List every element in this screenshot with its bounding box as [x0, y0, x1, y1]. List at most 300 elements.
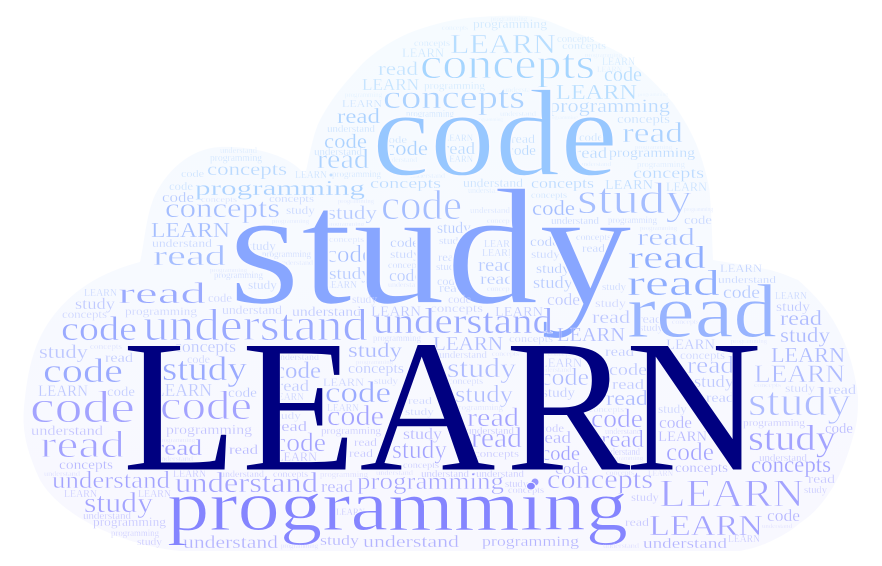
band: lavender blue words in the middle: understand	[222, 302, 283, 317]
band: lavender blue words in the middle: study	[748, 378, 852, 424]
band: light blue words at the top: understand	[503, 86, 540, 94]
band: violet blue words at the bottom: programming	[606, 456, 643, 462]
word: code: code	[372, 65, 618, 202]
band: periwinkle words around the large study: programming	[338, 199, 374, 205]
band: light blue words at the top: programming	[345, 91, 382, 99]
band: light blue words at the top: LEARN	[402, 45, 445, 60]
band: lavender blue words in the middle: read	[828, 383, 856, 398]
band: sky blue words around the large code: concepts	[617, 111, 670, 126]
band: lavender blue words in the middle: study	[776, 300, 810, 315]
band: violet blue words at the bottom: read	[349, 446, 373, 460]
band: periwinkle words around the large study: LEARN	[484, 239, 517, 250]
band: sky blue words around the large code	[169, 65, 708, 202]
band: periwinkle words around the large study: programming	[262, 249, 311, 259]
band: periwinkle words around the large study: study	[436, 262, 460, 273]
band: periwinkle words around the large study: study	[577, 174, 692, 223]
band: lavender blue words in the middle: read	[612, 377, 645, 393]
band: sky blue words around the large code: understand	[220, 146, 257, 155]
band: lavender blue words in the middle: understand	[538, 366, 572, 374]
band: lavender blue words in the middle: read	[118, 277, 206, 310]
band: violet blue words at the bottom: understand	[376, 469, 414, 477]
band: lavender blue words in the middle: concepts	[90, 342, 122, 351]
band: lavender blue words in the middle: concepts	[348, 361, 404, 377]
band: periwinkle words around the large study: read	[480, 271, 514, 288]
band: periwinkle words around the large study: read	[153, 240, 227, 272]
band: violet blue words at the bottom: concepts	[59, 458, 113, 473]
band: violet blue words at the bottom: read	[471, 423, 522, 454]
band: sky blue words around the large code: code	[181, 168, 204, 180]
band: violet blue words at the bottom: understand	[602, 447, 640, 458]
band: periwinkle words around the large study: code	[532, 196, 575, 220]
band: periwinkle words around the large study: study	[531, 247, 560, 261]
band: lavender blue words in the middle: concepts	[548, 352, 575, 358]
band: violet blue words at the bottom: understand	[421, 469, 469, 480]
band: lavender blue words in the middle: study	[447, 353, 517, 383]
band: periwinkle words around the large study: understand	[152, 236, 212, 250]
band: violet blue words at the bottom: study	[84, 488, 153, 519]
band: periwinkle words around the large study: LEARN	[720, 261, 762, 275]
band: violet blue words at the bottom: LEARN	[658, 429, 707, 445]
band: light blue words at the top: LEARN	[450, 29, 556, 59]
word: read large: read	[627, 270, 777, 354]
band: periwinkle words around the large study: LEARN	[325, 280, 357, 291]
band: lavender blue words in the middle: code	[609, 360, 647, 379]
band: lavender blue words in the middle: concepts	[174, 337, 236, 356]
band: violet blue words at the bottom: LEARN	[64, 489, 97, 500]
band: violet blue words at the bottom: programming	[743, 418, 805, 429]
band: lavender blue words in the middle: concepts	[448, 376, 484, 386]
band: periwinkle words around the large study: programming	[608, 215, 657, 225]
band: lavender blue words in the middle: LEARN	[154, 380, 212, 400]
band: violet blue words at the bottom: study	[137, 537, 162, 548]
band: sky blue words around the large code: code	[324, 131, 367, 153]
band: violet blue words at the bottom: read	[275, 419, 308, 435]
band: violet blue words at the bottom: programming	[357, 469, 504, 495]
band: violet blue words at the bottom: understand	[476, 469, 524, 480]
band: lavender blue words in the middle: LEARN	[771, 343, 845, 367]
band: violet blue words at the bottom: read	[40, 424, 125, 466]
band: violet blue words at the bottom: LEARN	[173, 468, 206, 480]
band: sky blue words around the large code: LEARN	[605, 178, 653, 193]
band: sky blue words around the large code: code	[383, 134, 407, 146]
band: lavender blue words in the middle: read	[780, 306, 823, 330]
band: lavender blue words in the middle: programming	[731, 339, 767, 345]
band: violet blue words at the bottom: code	[659, 413, 692, 432]
band: sky blue words around the large code: concepts	[383, 80, 525, 116]
band: periwinkle words around the large study: concepts	[576, 232, 612, 242]
band: violet blue words at the bottom	[30, 381, 853, 552]
band: sky blue words around the large code: concepts	[531, 190, 568, 200]
band: light blue words at the top: programming	[424, 80, 485, 92]
word: study: study	[228, 155, 632, 339]
band: violet blue words at the bottom: LEARN	[648, 469, 673, 478]
band: periwinkle words around the large study: concepts	[487, 217, 515, 225]
band: periwinkle words around the large study: code	[389, 266, 422, 285]
band: lavender blue words in the middle: code	[325, 376, 391, 409]
band: violet blue words at the bottom: read	[354, 435, 377, 449]
band: lavender blue words in the middle: programming	[356, 360, 393, 366]
band: lavender blue words in the middle: code	[274, 358, 321, 383]
band: lavender blue words in the middle: study	[455, 382, 513, 408]
band: violet blue words at the bottom: LEARN	[276, 449, 318, 464]
band: periwinkle words around the large study: code	[381, 183, 462, 229]
band: violet blue words at the bottom: programming	[281, 542, 318, 550]
band: violet blue words at the bottom: programming	[93, 514, 167, 529]
band: lavender blue words in the middle: code	[43, 353, 123, 390]
band: light blue words at the top: LEARN	[597, 65, 622, 74]
band: violet blue words at the bottom: code	[160, 382, 252, 428]
band: sky blue words around the large code: understand	[410, 172, 446, 180]
band: lavender blue words in the middle: read	[105, 351, 133, 366]
band: lavender blue words in the middle: LEARN	[272, 392, 304, 403]
band: periwinkle words around the large study: concepts	[269, 193, 314, 205]
band: periwinkle words around the large study: read	[627, 263, 720, 303]
band: light blue words at the top: concepts	[562, 40, 606, 52]
band: lavender blue words in the middle: code	[448, 292, 471, 306]
band: light blue words at the top: LEARN	[362, 75, 419, 94]
band: periwinkle words around the large study: understand	[470, 206, 510, 215]
band: violet blue words at the bottom: LEARN	[649, 510, 763, 542]
band: lavender blue words in the middle: read	[277, 378, 309, 395]
band: lavender blue words in the middle: concepts	[492, 350, 519, 358]
band: periwinkle words around the large study: code	[723, 282, 760, 302]
band: sky blue words around the large code: programming	[475, 118, 504, 123]
band: lavender blue words in the middle: understand	[292, 305, 361, 320]
band: violet blue words at the bottom: LEARN	[659, 472, 804, 515]
band: violet blue words at the bottom: understand	[83, 511, 131, 522]
band: violet blue words at the bottom: programming	[166, 423, 252, 438]
band: periwinkle words around the large study: study	[248, 277, 278, 292]
band: violet blue words at the bottom: read	[321, 477, 354, 496]
band: periwinkle words around the large study: study	[437, 220, 471, 237]
band: periwinkle words around the large study: study	[286, 203, 315, 217]
band: sky blue words around the large code: understand	[500, 110, 537, 118]
band: periwinkle words around the large study: programming	[684, 207, 713, 213]
band: lavender blue words in the middle: LEARN	[754, 361, 845, 388]
band: lavender blue words in the middle: study	[352, 292, 377, 306]
band: violet blue words at the bottom: understand	[643, 536, 728, 552]
band: violet blue words at the bottom: study	[505, 479, 528, 490]
band: lavender blue words in the middle: LEARN	[557, 324, 625, 346]
band: sky blue words around the large code: programming	[210, 153, 262, 164]
band: violet blue words at the bottom: study	[392, 435, 447, 464]
band: violet blue words at the bottom: programming	[320, 470, 368, 479]
band: violet blue words at the bottom: understand	[44, 470, 81, 478]
band: sky blue words around the large code: understand	[463, 175, 524, 190]
band: violet blue words at the bottom: code	[767, 506, 800, 525]
band: violet blue words at the bottom: understand	[603, 542, 640, 550]
band: lavender blue words in the middle: concepts	[754, 383, 782, 389]
band: light blue words at the top: programming	[491, 15, 527, 23]
band: violet blue words at the bottom: code	[274, 428, 326, 457]
band: lavender blue words in the middle: concepts	[672, 318, 699, 326]
band: light blue words at the top	[345, 15, 669, 104]
band: violet blue words at the bottom: concepts	[751, 452, 831, 477]
band: lavender blue words in the middle: LEARN	[433, 333, 503, 355]
word: programming: programming	[167, 466, 628, 546]
band: lavender blue words in the middle: study	[639, 322, 663, 334]
band: sky blue words around the large code: LEARN	[444, 154, 473, 164]
band: violet blue words at the bottom: code	[555, 459, 588, 478]
band: lavender blue words in the middle: study	[75, 296, 115, 313]
band: lavender blue words in the middle: LEARN	[495, 305, 543, 320]
band: sky blue words around the large code: read	[337, 104, 381, 128]
band: lavender blue words in the middle: study	[694, 372, 735, 391]
band: lavender blue words in the middle: understand	[275, 352, 320, 362]
band: periwinkle words around the large study: read	[438, 250, 460, 264]
band: lavender blue words in the middle: study	[348, 340, 402, 362]
band: periwinkle words around the large study: programming	[214, 270, 263, 280]
band: periwinkle words around the large study	[84, 155, 807, 339]
band: sky blue words around the large code: programming	[406, 109, 454, 120]
band: periwinkle words around the large study: programming	[640, 226, 677, 232]
band: violet blue words at the bottom: read	[601, 427, 644, 453]
band: periwinkle words around the large study: LEARN	[84, 287, 117, 299]
band: sky blue words around the large code: programming	[332, 169, 381, 179]
band: lavender blue words in the middle: concepts	[509, 334, 553, 345]
band: lavender blue words in the middle: concepts	[62, 307, 107, 321]
band: periwinkle words around the large study: study	[329, 264, 372, 283]
band: sky blue words around the large code: concepts	[370, 176, 441, 192]
band: violet blue words at the bottom: code	[327, 401, 384, 432]
band: violet blue words at the bottom: understand	[363, 532, 460, 551]
band: periwinkle words around the large study: understand	[551, 215, 599, 227]
band: sky blue words around the large code: programming	[635, 145, 672, 151]
band: violet blue words at the bottom: code	[30, 381, 135, 432]
band: sky blue words around the large code: understand	[580, 162, 611, 168]
band: lavender blue words in the middle: programming	[125, 304, 197, 318]
band: sky blue words around the large code: understand	[314, 147, 362, 158]
band: sky blue words around the large code: code	[507, 143, 536, 159]
band: violet blue words at the bottom: understand	[157, 455, 194, 463]
band: sky blue words around the large code: LEARN	[295, 169, 327, 181]
band: violet blue words at the bottom: code	[540, 421, 564, 435]
band: sky blue words around the large code: programming	[549, 96, 671, 117]
band: violet blue words at the bottom: understand	[183, 532, 278, 552]
band: violet blue words at the bottom: read	[229, 443, 258, 458]
band: sky blue words around the large code: read	[317, 144, 370, 174]
band: periwinkle words around the large study: programming	[210, 268, 247, 274]
band: periwinkle words around the large study: understand	[718, 274, 777, 286]
band: violet blue words at the bottom: LEARN	[138, 489, 171, 500]
band: sky blue words around the large code: programming	[609, 146, 695, 161]
band: violet blue words at the bottom: concepts	[403, 460, 440, 470]
band: violet blue words at the bottom: code	[666, 439, 714, 466]
band: periwinkle words around the large study: read	[637, 225, 695, 251]
band: periwinkle words around the large study: study	[247, 238, 277, 253]
band: sky blue words around the large code: LEARN	[444, 133, 473, 143]
band: lavender blue words in the middle: LEARN	[371, 304, 421, 320]
band: periwinkle words around the large study: understand	[388, 281, 424, 289]
band: light blue words at the top: concepts	[414, 38, 451, 48]
band: sky blue words around the large code: code	[385, 138, 428, 160]
band: periwinkle words around the large study: study	[390, 247, 420, 261]
band: violet blue words at the bottom: read	[808, 471, 836, 486]
band: periwinkle words around the large study: study	[536, 262, 570, 277]
band: periwinkle words around the large study: study	[439, 235, 465, 247]
band: periwinkle words around the large study: study	[533, 273, 574, 292]
band: lavender blue words in the middle: read	[408, 395, 433, 407]
band: violet blue words at the bottom: programming	[111, 528, 159, 538]
band: lavender blue words in the middle: study	[39, 342, 89, 363]
band: violet blue words at the bottom: study	[631, 490, 659, 504]
band: sky blue words around the large code: understand	[384, 156, 418, 164]
band: lavender blue words in the middle: LEARN	[666, 337, 715, 353]
band: sky blue words around the large code: programming	[195, 176, 366, 200]
band: lavender blue words in the middle: programming	[454, 403, 503, 412]
band: lavender blue words in the middle: study	[780, 323, 831, 347]
band: violet blue words at the bottom: understand	[52, 468, 170, 494]
band: violet blue words at the bottom: study	[748, 418, 836, 458]
band: violet blue words at the bottom: study	[804, 485, 827, 496]
band: periwinkle words around the large study: code	[326, 242, 373, 268]
band: periwinkle words around the large study: read	[628, 239, 706, 275]
band: light blue words at the top: concepts	[442, 24, 468, 32]
band: periwinkle words around the large study: programming	[327, 222, 364, 228]
band: periwinkle words around the large study: code	[390, 236, 419, 251]
band: violet blue words at the bottom: code	[541, 443, 580, 465]
band: periwinkle words around the large study: read	[478, 255, 515, 276]
band: periwinkle words around the large study: code	[530, 235, 559, 250]
band: violet blue words at the bottom: programming	[321, 426, 381, 437]
band: violet blue words at the bottom: understand	[220, 469, 265, 479]
band: periwinkle words around the large study: code	[437, 274, 460, 288]
band: lavender blue words in the middle: code	[61, 311, 137, 348]
band: sky blue words around the large code: concepts	[633, 165, 704, 182]
band: periwinkle words around the large study: LEARN	[482, 248, 515, 259]
band: violet blue words at the bottom: read	[625, 515, 649, 529]
band: lavender blue words in the middle: LEARN	[323, 375, 364, 389]
band: periwinkle words around the large study: read	[582, 241, 605, 255]
band: lavender blue words in the middle: concepts	[589, 405, 624, 414]
band: violet blue words at the bottom: concepts	[474, 448, 519, 460]
band: sky blue words around the large code: LEARN	[342, 98, 382, 110]
band: lavender blue words in the middle: read	[687, 353, 734, 379]
band: violet blue words at the bottom: understand	[759, 453, 807, 464]
band: violet blue words at the bottom: understand	[466, 426, 514, 437]
band: violet blue words at the bottom: study	[403, 426, 442, 443]
band: sky blue words around the large code: programming	[637, 160, 685, 169]
band: sky blue words around the large code: read	[575, 145, 607, 162]
band: violet blue words at the bottom: concepts	[675, 461, 728, 476]
band: violet blue words at the bottom: concepts	[547, 464, 653, 494]
band: violet blue words at the bottom: code	[591, 404, 643, 433]
band: light blue words at the top: read	[378, 59, 419, 80]
band: violet blue words at the bottom: code	[825, 421, 853, 437]
band: periwinkle words around the large study: study	[602, 282, 626, 293]
band: sky blue words around the large code: concepts	[207, 159, 287, 179]
band: sky blue words around the large code: read	[511, 131, 536, 146]
band: lavender blue words in the middle: read	[706, 391, 734, 406]
band: light blue words at the top: programming	[473, 16, 548, 31]
band: light blue words at the top: code	[604, 64, 642, 86]
band: sky blue words around the large code: read	[443, 139, 476, 158]
band: violet blue words at the bottom: LEARN	[336, 507, 365, 517]
band: violet blue words at the bottom: study	[320, 533, 360, 549]
band: light blue words at the top: programming	[638, 93, 669, 98]
band: periwinkle words around the large study: concepts	[388, 260, 424, 270]
band: lavender blue words in the middle: code	[187, 352, 210, 366]
band: periwinkle words around the large study: concepts	[487, 285, 515, 293]
band: lavender blue words in the middle: code	[107, 385, 135, 400]
band: violet blue words at the bottom: programming	[158, 438, 195, 444]
band: violet blue words at the bottom: concepts	[273, 469, 309, 479]
band: violet blue words at the bottom: LEARN	[728, 534, 760, 545]
band: periwinkle words around the large study: LEARN	[151, 218, 230, 242]
word: concepts: concepts	[420, 41, 595, 88]
band: sky blue words around the large code: code	[579, 130, 603, 144]
band: lavender blue words in the middle: read	[592, 307, 630, 327]
band: light blue words at the top: LEARN	[556, 80, 637, 104]
band: violet blue words at the bottom: understand	[762, 524, 792, 530]
band: violet blue words at the bottom: concepts	[606, 469, 634, 477]
band: lavender blue words in the middle: code	[540, 365, 589, 391]
band: sky blue words around the large code: understand	[327, 124, 375, 135]
band: lavender blue words in the middle: study	[658, 401, 688, 416]
band: light blue words at the top: programming	[585, 53, 622, 59]
band: periwinkle words around the large study: understand	[278, 259, 314, 267]
band: lavender blue words in the middle: code	[208, 290, 232, 305]
band: sky blue words around the large code: concepts	[531, 176, 594, 192]
band: lavender blue words in the middle: LEARN	[327, 403, 359, 414]
band: lavender blue words in the middle: study	[595, 296, 626, 310]
band: lavender blue words in the middle: code	[547, 290, 580, 309]
band: lavender blue words in the middle: understand	[439, 350, 487, 361]
band: lavender blue words in the middle: study	[405, 406, 435, 418]
band: lavender blue words in the middle: study	[785, 381, 815, 395]
band: periwinkle words around the large study: concepts	[329, 235, 364, 244]
band: periwinkle words around the large study: LEARN	[775, 291, 807, 302]
band: violet blue words at the bottom: understand	[175, 467, 319, 499]
word: LEARN main dark navy: LEARN	[122, 302, 762, 512]
band: periwinkle words around the large study: study	[327, 203, 378, 224]
word: understand left: understand	[143, 300, 368, 350]
band: lavender blue words in the middle: study	[162, 351, 247, 388]
band: periwinkle words around the large study: code	[162, 190, 194, 206]
band: lavender blue words in the middle: study	[272, 410, 302, 422]
band: violet blue words at the bottom: read	[467, 403, 519, 432]
band: lavender blue words in the middle: LEARN	[540, 355, 583, 370]
band: lavender blue words in the middle: study	[374, 376, 399, 386]
band: violet blue words at the bottom: understand	[31, 424, 103, 439]
band: lavender blue words in the middle: programming	[373, 333, 421, 343]
band: periwinkle words around the large study: concepts	[201, 195, 237, 204]
band: lavender blue words in the middle: concepts	[680, 348, 725, 362]
band: lavender blue words in the middle: study	[542, 386, 575, 401]
band: lavender blue words in the middle: concepts	[430, 301, 483, 315]
band: sky blue words around the large code: read	[622, 118, 683, 149]
band: periwinkle words around the large study: concepts	[165, 193, 280, 223]
band: violet blue words at the bottom: concepts	[508, 485, 545, 495]
band: sky blue words around the large code: programming	[547, 116, 579, 121]
band: lavender blue words in the middle	[38, 270, 856, 424]
band: lavender blue words in the middle: read	[606, 386, 649, 410]
band: lavender blue words in the middle: read	[605, 345, 634, 360]
band: violet blue words at the bottom: read	[538, 428, 572, 447]
band: lavender blue words in the middle: read	[638, 311, 663, 326]
band: violet blue words at the bottom: read	[155, 435, 202, 460]
band: sky blue words around the large code: LEARN	[666, 179, 708, 194]
band: violet blue words at the bottom: understand	[605, 427, 641, 436]
band: lavender blue words in the middle: code	[228, 386, 257, 401]
band: periwinkle words around the large study: code	[684, 212, 712, 227]
band: light blue words at the top: concepts	[557, 34, 594, 45]
band: sky blue words around the large code: code	[169, 179, 193, 193]
band: sky blue words around the large code: understand	[468, 186, 503, 195]
band: violet blue words at the bottom: programming	[482, 534, 580, 550]
band: lavender blue words in the middle: LEARN	[38, 383, 88, 400]
word: understand right: understand	[373, 301, 553, 341]
